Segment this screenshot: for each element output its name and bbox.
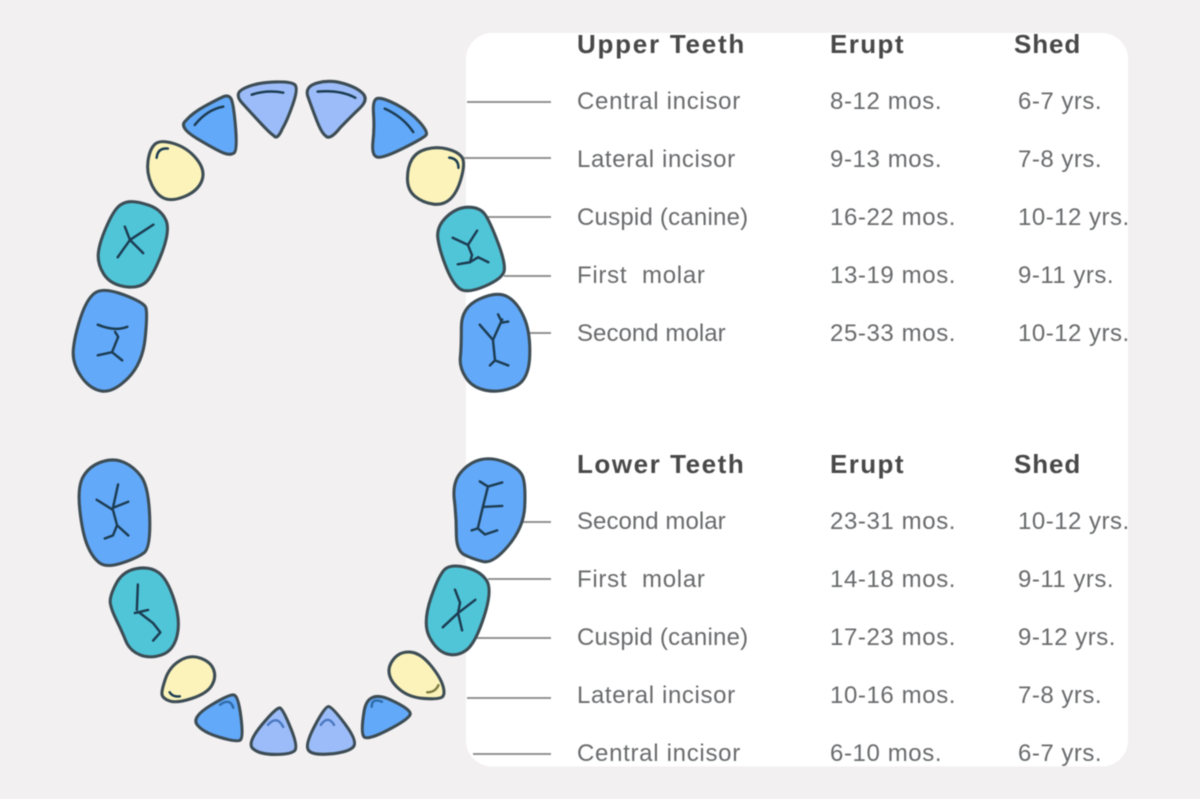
- icon: lower right first molar: [426, 566, 489, 655]
- row: lower central incisor: Central incisor: [577, 740, 741, 767]
- row: upper lateral incisor: Lateral incisor: [577, 146, 736, 173]
- row: upper first molar: 13-19 mos.: [830, 262, 956, 289]
- lower teeth table heading: Erupt: [830, 449, 905, 479]
- icon: lower left cuspid: [162, 657, 215, 702]
- lower teeth table heading: [578, 453, 1080, 480]
- upper teeth table heading: Erupt: [830, 29, 905, 59]
- row: upper cuspid: 10-12 yrs.: [1018, 204, 1130, 231]
- row: lower cuspid: Cuspid (canine): [577, 624, 748, 651]
- row: upper lateral incisor: [577, 146, 1102, 173]
- row: lower second molar: 23-31 mos.: [830, 508, 956, 535]
- icon: upper left central incisor: [238, 82, 296, 137]
- row: upper cuspid: Cuspid (canine): [577, 204, 748, 231]
- icon: lower right cuspid: [389, 652, 444, 699]
- icon: lower left central incisor: [251, 708, 296, 754]
- row: upper central incisor: 6-7 yrs.: [1018, 88, 1102, 115]
- row: upper central incisor: Central incisor: [577, 88, 741, 115]
- leader lines from teeth to table rows: [464, 102, 551, 754]
- row: lower first molar: [577, 566, 1114, 593]
- upper teeth table heading: Shed: [1014, 29, 1081, 59]
- row: lower lateral incisor: Lateral incisor: [577, 682, 736, 709]
- row: upper lateral incisor: 7-8 yrs.: [1018, 146, 1102, 173]
- row: upper second molar: [577, 320, 1130, 347]
- row: lower central incisor: 6-10 mos.: [830, 740, 942, 767]
- table: eruption and shedding times: [577, 29, 1130, 767]
- row: upper second molar: 25-33 mos.: [830, 320, 956, 347]
- lower teeth table heading: Lower Teeth: [577, 449, 745, 479]
- icon: upper left lateral incisor: [183, 96, 236, 154]
- upper teeth table heading: [578, 33, 1080, 60]
- panel: white table background: [466, 33, 1128, 766]
- row: lower cuspid: 17-23 mos.: [830, 624, 956, 651]
- row: lower lateral incisor: 7-8 yrs.: [1018, 682, 1102, 709]
- row: upper second molar: 10-12 yrs.: [1018, 320, 1130, 347]
- icon: lower right second molar: [454, 459, 525, 562]
- row: lower central incisor: 6-7 yrs.: [1018, 740, 1102, 767]
- row: lower cuspid: 9-12 yrs.: [1018, 624, 1116, 651]
- icon: lower left first molar: [110, 568, 178, 657]
- row: lower cuspid: [577, 624, 1116, 651]
- row: upper cuspid: 16-22 mos.: [830, 204, 956, 231]
- icon: upper right first molar: [438, 207, 504, 291]
- icon: upper right lateral incisor: [373, 98, 427, 157]
- row: upper lateral incisor: 9-13 mos.: [830, 146, 942, 173]
- icon: lower left lateral incisor: [196, 695, 242, 741]
- row: lower second molar: Second molar: [577, 508, 726, 535]
- row: upper first molar: 9-11 yrs.: [1018, 262, 1114, 289]
- icon: upper right cuspid: [407, 148, 464, 204]
- icon: upper left cuspid: [148, 142, 203, 200]
- row: lower second molar: [577, 508, 1130, 535]
- upper teeth table heading: Upper Teeth: [577, 29, 746, 59]
- row: lower lateral incisor: 10-16 mos.: [830, 682, 956, 709]
- row: lower first molar: First molar: [577, 566, 706, 593]
- row: lower first molar: 9-11 yrs.: [1018, 566, 1114, 593]
- row: lower lateral incisor: [577, 682, 1102, 709]
- row: lower second molar: 10-12 yrs.: [1018, 508, 1130, 535]
- icon: upper left second molar: [73, 290, 147, 391]
- icon: lower right central incisor: [307, 707, 355, 754]
- icon: upper left first molar: [98, 202, 167, 287]
- row: upper first molar: First molar: [577, 262, 706, 289]
- icon: lower right lateral incisor: [362, 696, 410, 738]
- row: upper cuspid: [577, 204, 1130, 231]
- icon: lower left second molar: [79, 460, 150, 566]
- lower teeth table heading: Shed: [1014, 449, 1081, 479]
- row: upper central incisor: 8-12 mos.: [830, 88, 942, 115]
- row: upper first molar: [577, 262, 1114, 289]
- row: upper central incisor: [577, 88, 1102, 115]
- icon: upper right second molar: [460, 294, 530, 391]
- row: lower first molar: 14-18 mos.: [830, 566, 956, 593]
- icon: upper right central incisor: [307, 81, 365, 137]
- row: lower central incisor: [577, 740, 1102, 767]
- row: upper second molar: Second molar: [577, 320, 726, 347]
